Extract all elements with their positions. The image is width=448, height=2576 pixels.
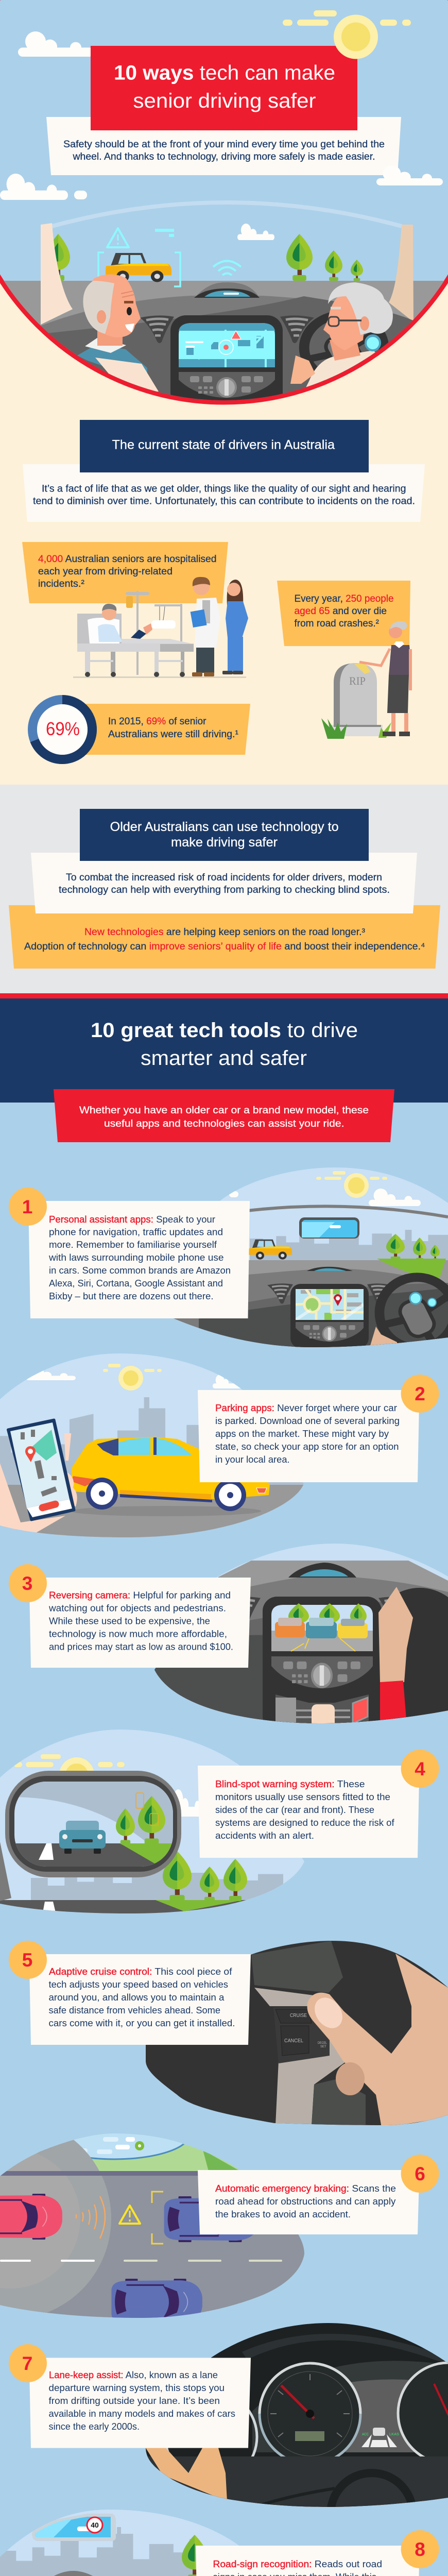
senior man passenger (77, 274, 159, 392)
intro red banner: Whether you have an older car or a brand new model, these (79, 1105, 369, 1116)
item 3: reversing camera (9, 1540, 448, 1731)
description: Blind-spot warning system: These (215, 1779, 365, 1789)
description: Alexa, Siri, Cortana, Google Assistant and (49, 1278, 223, 1289)
description: monitors usually use sensors fitted to the (215, 1792, 390, 1802)
description: safe distance from vehicles ahead. Some (48, 2005, 220, 2015)
intro red banner (54, 1089, 394, 1142)
hand (307, 1954, 448, 2128)
panel: older Australians can use technology (9, 809, 440, 969)
heading box (80, 809, 369, 861)
callout: still driving (85, 704, 250, 755)
badge: number 8: 8 (415, 2539, 425, 2560)
callout text: Adoption of technology can improve seniors’ quality of life and boost their independence.⁴ (24, 941, 425, 952)
card (29, 2358, 251, 2448)
badge: number 6: 6 (415, 2163, 425, 2184)
callout: still driving: Australians were still driving.¹ (108, 729, 238, 740)
description: systems are designed to reduce the risk of (215, 1818, 395, 1828)
description: Bixby – but there are dozens out there. (49, 1291, 213, 1301)
description: with laws surrounding mobile phone use (48, 1252, 223, 1263)
description (48, 1967, 235, 2028)
intro text: wheel. And thanks to technology, driving more safely is made easier. (72, 151, 375, 162)
item 8: road-sign recognition (0, 2506, 439, 2576)
badge: number 5 (9, 1941, 47, 1979)
clouds: lower (0, 165, 443, 200)
callout: hospitalised (22, 542, 228, 603)
illustration: parked car and phone (0, 1350, 309, 1541)
callout: road deaths: aged 65 and over die (295, 606, 387, 617)
illustration: side mirror (0, 1726, 309, 1917)
white ribbon (31, 853, 417, 913)
woman figure (359, 621, 412, 736)
description: around you, and allows you to maintain a (48, 1992, 225, 2003)
item 1: personal assistant apps (9, 1164, 448, 1353)
illustration: thumb on cruise controls: CRUISE (290, 2013, 307, 2019)
body text: technology can help with everything from parking to checking blind spots. (59, 885, 390, 895)
illustration: road top view (0, 2133, 304, 2318)
hero illustration: seniors in car cabin (0, 202, 448, 415)
heading: 10 great tech tools: smarter and safer (141, 1047, 307, 1070)
blue cars (111, 2196, 259, 2325)
callout: still driving: In 2015, 69% of senior (108, 716, 206, 727)
heading: 10 great tech tools (91, 1019, 358, 1070)
body text (59, 872, 390, 895)
item 2: parking apps (0, 1350, 439, 1541)
lane assist display: ACC (362, 2433, 369, 2436)
badge: number 4: 4 (415, 1758, 425, 1780)
doctor (191, 577, 220, 676)
description: Lane-keep assist: Also, known as a lane (49, 2370, 218, 2380)
badge: number 3: 3 (22, 1573, 32, 1594)
description: from drifting outside your lane. It’s been (48, 2396, 220, 2406)
brackets (152, 2192, 163, 2244)
description: tech adjusts your speed based on vehicles (48, 1979, 228, 1990)
icon: sun disc (334, 14, 378, 59)
description: departure warning system, this stops you (48, 2383, 225, 2393)
intro text: It’s a fact of life that as we get older, things like the quality of our sight and hearing (42, 484, 406, 495)
description (215, 1779, 395, 1841)
description: Road-sign recognition: Reads out road (213, 2559, 382, 2569)
mirror with small sign: 40 (91, 2521, 99, 2529)
badge: number 7: 7 (22, 2353, 32, 2374)
description: technology is now much more affordable, (49, 1629, 227, 1639)
intro ribbon (23, 464, 425, 522)
badge: number 2: 2 (415, 1383, 425, 1404)
card (198, 1766, 419, 1858)
body text: To combat the increased risk of road incidents for older drivers, modern (66, 872, 382, 883)
badge: number 1: 1 (22, 1196, 32, 1217)
intro text: Safety should be at the front of your mind every time you get behind the (63, 139, 385, 150)
hand holding phone (0, 1420, 76, 1533)
heading: 10 great tech tools: 10 great tech tools to drive (91, 1019, 358, 1042)
callout: hospitalised: incidents.² (38, 579, 84, 589)
icon: sun with rays (283, 10, 411, 26)
illustration: instrument cluster (144, 2318, 448, 2555)
callout: hospitalised: 4,000 Australian seniors are hospitalised (38, 554, 216, 565)
badge: number 3 (9, 1564, 47, 1602)
road (4, 281, 444, 400)
card (198, 1390, 419, 1482)
heading: The current state of drivers in Australia (112, 437, 335, 452)
title text (114, 62, 335, 112)
callout text: New technologies are helping keep seniors on the road longer.³ (84, 927, 365, 938)
vents (140, 315, 314, 343)
illustration: speed sign on screen (0, 2506, 309, 2576)
description: apps on the market. These might vary by (215, 1429, 389, 1439)
illustration: reversing camera screen (149, 1540, 448, 1731)
description: and prices may start as low as around $100. (49, 1641, 233, 1652)
badge: number 7 (9, 2344, 47, 2382)
detection brackets (98, 252, 180, 286)
nurse (222, 580, 248, 674)
description: Personal assistant apps: Speak to your (49, 1214, 215, 1225)
heading: make driving safer (171, 835, 278, 850)
intro text (63, 139, 385, 162)
description (215, 2183, 396, 2219)
heading box (80, 420, 369, 472)
description (215, 1403, 400, 1465)
description (48, 2370, 235, 2432)
description (213, 2559, 400, 2576)
description: in your local area. (215, 1454, 290, 1465)
yellow car (106, 253, 171, 282)
panel: current state of drivers (22, 420, 425, 759)
badge: number 6 (401, 2155, 439, 2193)
illustration: thumb on cruise controls: SET (320, 2045, 326, 2048)
windscreen pillars (41, 223, 413, 325)
description: state, so check your app store for an option (215, 1442, 399, 1452)
item 5: adaptive cruise control (9, 1937, 448, 2128)
hero sky dome with red rim (0, 0, 448, 402)
badge: number 5: 5 (22, 1950, 32, 1971)
heading: Older Australians can use technology to (110, 820, 339, 834)
icon: signal waves (76, 2196, 105, 2239)
badge: number 4 (401, 1750, 439, 1788)
description (48, 1590, 233, 1652)
callout text (24, 927, 425, 952)
hero intro ribbon (46, 117, 401, 175)
dashboard (41, 282, 413, 400)
title block (91, 46, 357, 130)
icon: warning triangle (107, 228, 129, 247)
description: sides of the car (rear and front). These (215, 1805, 374, 1815)
mirror with small sign (32, 2514, 116, 2541)
lane assist display (361, 2428, 399, 2447)
card (29, 1578, 251, 1668)
orange callout (9, 905, 440, 969)
mirror (5, 1771, 181, 1877)
description (48, 1214, 231, 1301)
description: in cars. Some common brands are Amazon (49, 1265, 231, 1276)
description: Automatic emergency braking: Scans the (215, 2183, 396, 2194)
description: cars come with it, or you can get it installed. (48, 2018, 235, 2028)
badge: number 8 (401, 2530, 439, 2568)
cloud: top left (18, 31, 94, 57)
chart: 69% donut (32, 700, 92, 759)
card (29, 1954, 251, 2045)
illustration: woman at tombstone: RIP (349, 674, 366, 687)
description: phone for navigation, traffic updates and (49, 1227, 223, 1238)
description: more. Remember to familiarise yourself (49, 1240, 217, 1250)
description: accidents with an alert. (215, 1831, 314, 1841)
illustration: thumb on cruise controls: CANCEL (284, 2038, 303, 2044)
title text: senior driving safer (133, 90, 316, 112)
heading (110, 820, 339, 850)
item 6: automatic emergency braking (0, 2133, 439, 2318)
callout: hospitalised: each year from driving-related (38, 566, 173, 577)
card (28, 1201, 250, 1318)
description: Adaptive cruise control: This cool piece of (49, 1967, 233, 1977)
illustration: thumb on cruise controls (144, 1937, 448, 2128)
description: the brakes to avoid an accident. (215, 2209, 351, 2219)
illustration: woman at tombstone (321, 621, 412, 739)
trees (46, 234, 363, 281)
hand (146, 2448, 227, 2501)
icon: warning (119, 2206, 140, 2224)
chart: 69% donut: 69% (46, 718, 80, 739)
card (198, 2170, 419, 2234)
senior woman driver (290, 282, 393, 392)
description: Parking apps: Never forget where your car (215, 1403, 397, 1413)
illustration: hospital patient and staff (73, 577, 248, 678)
description: available in many models and makes of cars (48, 2409, 235, 2419)
intro text: tend to diminish over time. Unfortunately, this can contribute to incidents on the road. (33, 496, 415, 507)
intro red banner: useful apps and technologies can assist your ride. (104, 1118, 344, 1129)
illustration: thumb on cruise controls: DECEL (318, 2042, 328, 2045)
badge: number 2 (401, 1375, 439, 1413)
callout: road deaths: Every year, 250 people (295, 594, 393, 604)
description: While these used to be expensive, the (49, 1616, 210, 1626)
lane assist display: LKAS (389, 2433, 399, 2436)
red car (0, 2194, 62, 2240)
description: is parked. Download one of several parking (215, 1416, 400, 1426)
steering wheel (304, 314, 384, 381)
description: watching out for objects and pedestrians. (48, 1603, 226, 1614)
description: since the early 2000s. (48, 2421, 140, 2432)
navigation console (170, 315, 283, 408)
yellow car (71, 1437, 270, 1511)
illustration: dashboard with navigation (174, 1167, 448, 1347)
item 7: lane-keep assist (9, 2323, 448, 2507)
callout: road deaths: from road crashes.² (295, 618, 379, 629)
icon: wifi (213, 261, 241, 275)
item 4: blind-spot warning (0, 1726, 439, 1917)
speedometer (260, 2363, 360, 2464)
intro text (33, 484, 415, 507)
description: road ahead for obstructions and can apply (215, 2196, 395, 2207)
title text: 10 ways tech can make (114, 62, 335, 84)
callout: road deaths (277, 581, 410, 646)
badge: number 1 (9, 1188, 47, 1226)
description: Reversing camera: Helpful for parking and (49, 1590, 231, 1600)
card (196, 2546, 419, 2576)
